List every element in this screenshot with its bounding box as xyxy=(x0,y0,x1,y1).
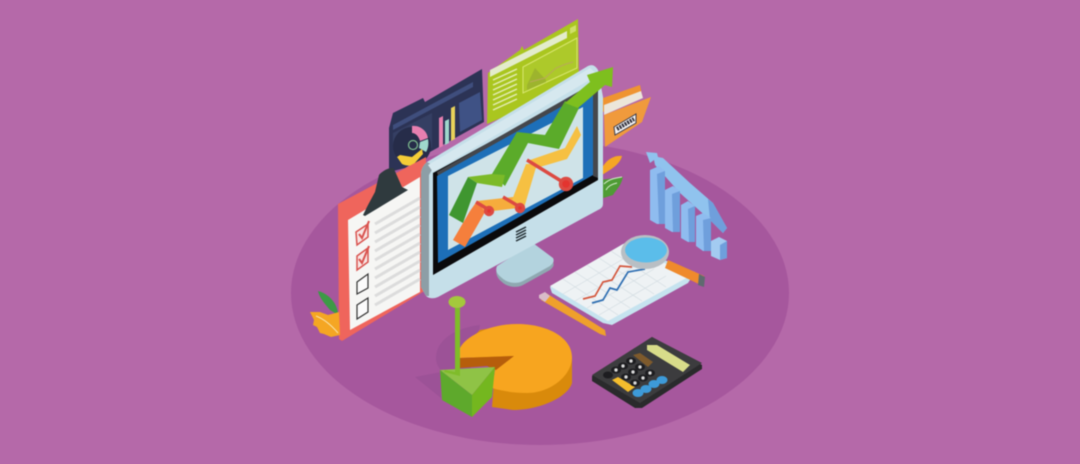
magnifying glass xyxy=(621,235,705,287)
clip xyxy=(363,168,408,216)
checkbox checked xyxy=(356,221,369,245)
calculator xyxy=(592,337,702,408)
monitor xyxy=(421,65,613,298)
bar chart: falling blue bars xyxy=(646,152,727,260)
black keys xyxy=(603,358,655,386)
clipboard xyxy=(338,157,426,341)
monitor logo lines xyxy=(516,227,526,241)
red trend line xyxy=(583,266,632,299)
monitor stand xyxy=(496,243,554,287)
display xyxy=(647,345,690,372)
pie slice with pin xyxy=(415,296,495,417)
line chart: orange line xyxy=(453,126,581,247)
plant behind monitor xyxy=(600,156,623,199)
growth arrow xyxy=(449,67,613,223)
donut chart xyxy=(393,126,431,166)
graph paper notepad xyxy=(550,243,695,325)
blue keys xyxy=(632,376,668,397)
folder xyxy=(603,85,651,147)
red pins xyxy=(476,160,572,214)
panel: dark dashboard xyxy=(389,69,484,172)
pencil xyxy=(539,292,606,336)
blue trend line xyxy=(592,269,645,303)
pie chart xyxy=(436,324,572,410)
text lines xyxy=(493,69,517,110)
panel: green document xyxy=(487,19,579,124)
floor ellipse xyxy=(291,141,789,445)
checkbox checked xyxy=(357,246,369,270)
checklist lines xyxy=(375,198,420,305)
leaves left of clipboard xyxy=(310,291,340,337)
chart bars xyxy=(439,106,455,148)
screen xyxy=(433,83,598,275)
checkbox empty xyxy=(357,298,368,319)
yellow key xyxy=(612,377,635,392)
checkbox empty xyxy=(357,274,368,294)
mini chart xyxy=(523,38,577,93)
